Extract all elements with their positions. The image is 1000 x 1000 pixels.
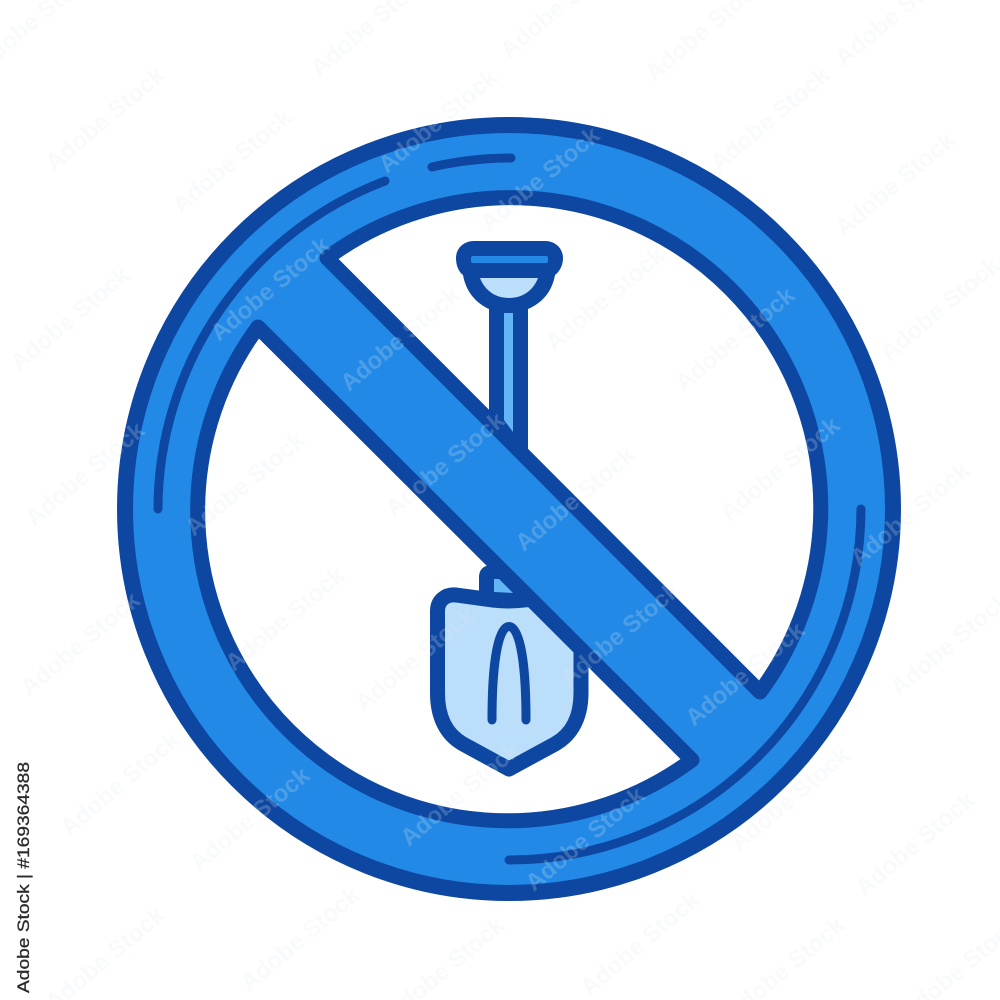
stock watermarks: Adobe Stock [180, 426, 311, 542]
ring highlight: short top arc [432, 158, 511, 167]
shovel handle grip [456, 241, 563, 309]
stock watermarks: Adobe Stock [5, 261, 136, 377]
ring highlight: lower right arc [509, 509, 861, 860]
icon: prohibition ring [125, 125, 893, 893]
stock watermarks: Adobe Stock [715, 411, 846, 527]
stock watermarks: Adobe Stock [55, 726, 186, 842]
upper right white segment [327, 198, 821, 692]
stock watermarks: Adobe Stock [830, 126, 961, 242]
shovel blade [438, 595, 581, 769]
stock watermarks: Adobe Stock [185, 761, 316, 877]
stock watermarks: Adobe Stock [40, 61, 171, 177]
stock watermarks: Adobe Stock [680, 616, 811, 732]
stock watermarks: Adobe Stock [705, 61, 836, 177]
stock watermarks: Adobe Stock [220, 561, 351, 677]
stock watermarks: Adobe Stock [575, 886, 706, 1000]
stock watermarks: Adobe Stock [540, 241, 671, 357]
shaft highlight [504, 313, 513, 432]
stock credit text: Adobe Stock | #169364388 [14, 762, 33, 993]
stock watermarks: Adobe Stock [350, 601, 481, 717]
stock watermarks: Adobe Stock [510, 441, 641, 557]
stock watermarks: Adobe Stock [15, 586, 146, 702]
lower left white segment [198, 327, 692, 821]
stock watermarks: Adobe Stock [395, 736, 526, 852]
blade ridge [492, 626, 526, 720]
stock watermarks: Adobe Stock [670, 281, 801, 397]
ring highlight: long left arc [158, 181, 385, 509]
stock watermarks: Adobe Stock [725, 741, 856, 857]
stock watermarks: Adobe Stock [235, 881, 366, 997]
shovel shaft [489, 305, 528, 450]
upper right segment outline [327, 198, 821, 692]
stock watermarks: Adobe Stock [167, 103, 298, 219]
neck highlight [494, 579, 513, 593]
stock watermarks: Adobe Stock [520, 781, 651, 897]
stock watermarks: Adobe Stock [475, 121, 606, 237]
stock watermarks: Adobe Stock [205, 231, 336, 347]
stock watermarks: Adobe Stock [20, 416, 151, 532]
prohibition diagonal bar [258, 258, 760, 760]
stock watermarks: Adobe Stock [850, 786, 981, 902]
shovel neck [479, 565, 530, 600]
grip highlight [471, 256, 548, 263]
grip cup [480, 278, 538, 298]
stock watermarks: Adobe Stock [373, 63, 504, 179]
stock watermarks: Adobe Stock [335, 281, 466, 397]
stock watermarks: Adobe Stock [555, 576, 686, 692]
stock watermarks: Adobe Stock [845, 456, 976, 572]
icon: shovel [438, 241, 581, 769]
stock watermarks: Adobe Stock [380, 406, 511, 522]
lower left segment outline [198, 327, 692, 821]
